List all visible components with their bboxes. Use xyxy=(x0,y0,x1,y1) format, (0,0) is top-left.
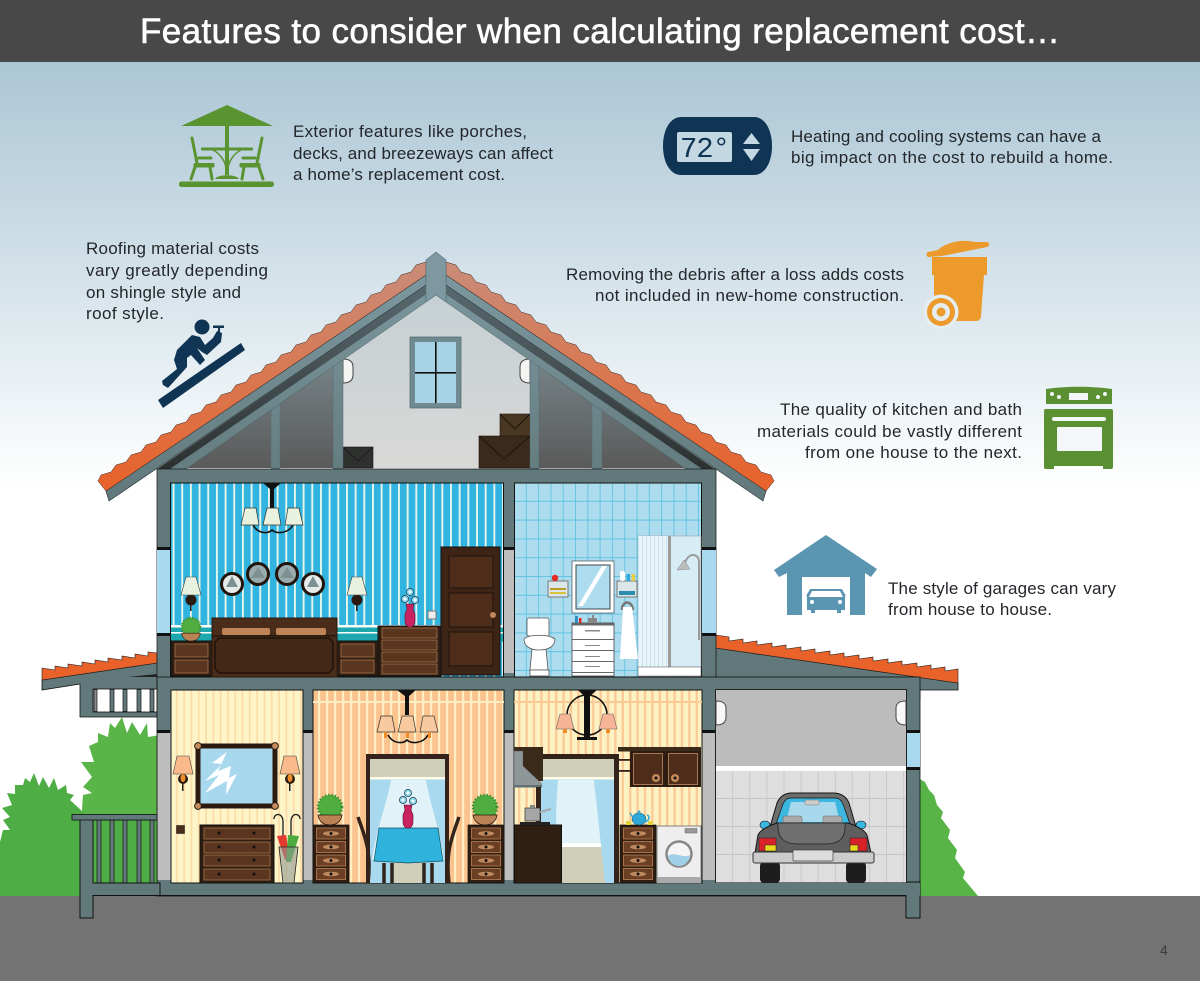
debris text: not included in new-home construction. xyxy=(595,286,904,305)
callout: kitchen and bath xyxy=(757,387,1113,469)
plant xyxy=(182,618,200,641)
towel xyxy=(620,602,638,659)
attic wall lamps xyxy=(343,359,530,383)
stove counter xyxy=(514,805,562,883)
vanity xyxy=(572,615,614,676)
chandelier dining xyxy=(377,690,438,743)
exterior text: a home’s replacement cost. xyxy=(293,165,505,184)
foundation right xyxy=(906,882,920,918)
wall windows and strips xyxy=(157,547,920,880)
icon: thermostat: 72° xyxy=(680,133,730,166)
shower xyxy=(638,536,701,676)
shrub right xyxy=(918,778,978,896)
chandelier xyxy=(241,483,303,533)
icon: roofer xyxy=(158,320,245,408)
walls xyxy=(93,469,920,918)
nightstands xyxy=(171,641,378,676)
roofing text: Roofing material costs xyxy=(86,239,259,258)
umbrella stand xyxy=(274,814,300,883)
kitchen window xyxy=(541,754,619,883)
icon: thermostat xyxy=(663,117,772,175)
door xyxy=(441,547,500,675)
roof left xyxy=(98,262,426,501)
roof right xyxy=(446,262,774,501)
attic window xyxy=(410,337,461,408)
dining window xyxy=(366,754,449,883)
range hood xyxy=(514,751,543,825)
heating text: Heating and cooling systems can have a xyxy=(791,127,1102,146)
outlet xyxy=(176,826,184,834)
chandelier kitchen xyxy=(556,690,617,740)
callout: debris removal xyxy=(566,241,989,330)
round pictures xyxy=(222,564,324,594)
porch roof xyxy=(42,652,157,717)
plants xyxy=(318,795,342,825)
roofing text: vary greatly depending xyxy=(86,261,268,280)
living dresser xyxy=(200,825,274,883)
roofing text: on shingle style and xyxy=(86,283,241,302)
wall lamps xyxy=(181,577,367,611)
background sky xyxy=(0,62,1200,502)
shrubs left xyxy=(0,717,160,896)
roofing text: roof style. xyxy=(86,304,164,323)
vase xyxy=(401,588,419,627)
title bar xyxy=(0,0,1200,62)
garage roof xyxy=(716,635,958,700)
room: kitchen xyxy=(514,690,702,883)
living lamps xyxy=(173,756,300,791)
callout: heating and cooling xyxy=(663,117,1113,175)
room: garage xyxy=(716,690,906,883)
exterior text: Exterior features like porches, xyxy=(293,122,527,141)
title: Features to consider when calculating replacement cost… xyxy=(140,12,1060,51)
dresser xyxy=(378,626,441,676)
callout: garages xyxy=(774,535,1116,619)
icon: patio umbrella xyxy=(179,105,274,187)
callout: roofing xyxy=(86,239,268,408)
kitchen text: The quality of kitchen and bath xyxy=(780,400,1022,419)
kitchen text: materials could be vastly different xyxy=(757,422,1022,441)
attic boxes xyxy=(343,414,530,468)
garage lamps xyxy=(716,701,906,725)
ground xyxy=(0,896,1200,981)
room: bathroom xyxy=(514,483,702,677)
icon: garage xyxy=(774,535,877,615)
tablecloth xyxy=(374,828,443,863)
garage text: from house to house. xyxy=(888,600,1052,619)
ridge post xyxy=(426,252,446,302)
bed xyxy=(212,618,337,677)
shelves xyxy=(548,571,637,597)
room: living xyxy=(171,690,303,883)
dining cabinets xyxy=(313,825,349,883)
debris text: Removing the debris after a loss adds costs xyxy=(566,265,904,284)
exterior text: decks, and breezeways can affect xyxy=(293,144,553,163)
washer xyxy=(657,826,701,883)
teapot xyxy=(626,810,653,825)
dining vase xyxy=(399,789,417,828)
attic posts xyxy=(271,342,602,469)
room: bedroom xyxy=(170,483,504,677)
garage text: The style of garages can vary xyxy=(888,579,1116,598)
icon: wheeled bin xyxy=(924,241,989,330)
porch railing and post xyxy=(72,814,160,918)
house xyxy=(42,252,958,918)
valance xyxy=(514,747,701,772)
framed mirror xyxy=(195,743,278,809)
kitchen cabinet xyxy=(620,825,656,883)
upper cabinets xyxy=(630,751,701,787)
switch xyxy=(428,611,436,619)
kitchen text: from one house to the next. xyxy=(805,443,1022,462)
heating text: big impact on the cost to rebuild a home. xyxy=(791,148,1113,167)
callout: exterior features xyxy=(179,105,553,187)
car xyxy=(753,793,874,883)
icon: oven xyxy=(1044,387,1113,469)
toilet xyxy=(524,618,555,676)
room: dining xyxy=(313,690,504,883)
attic xyxy=(186,295,686,469)
bath mirror xyxy=(572,561,614,613)
page number: 4 xyxy=(1160,942,1168,958)
porch vent xyxy=(93,689,157,712)
chairs xyxy=(358,817,459,883)
